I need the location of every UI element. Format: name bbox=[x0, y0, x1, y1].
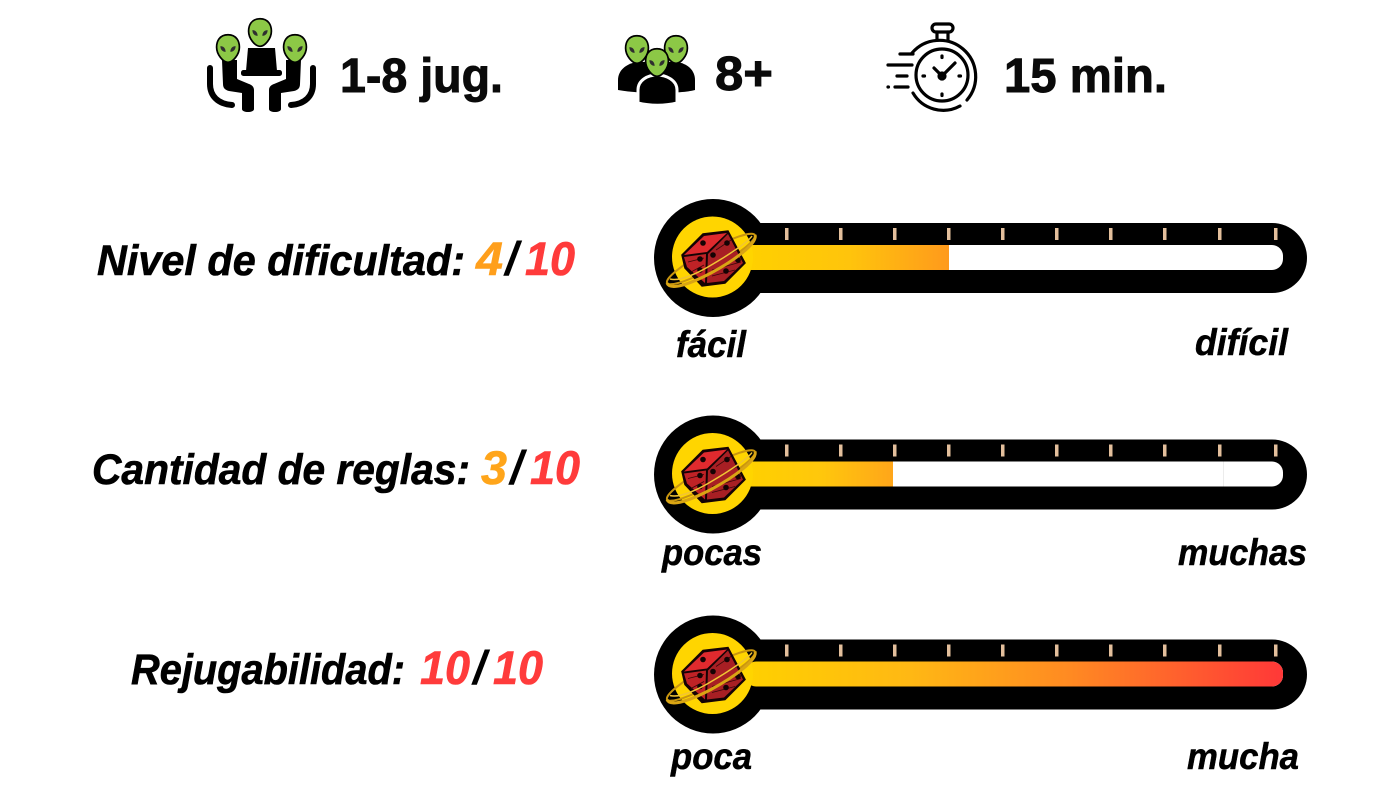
label: difficulty: 4 bbox=[475, 232, 503, 285]
text: age: 8+ bbox=[715, 48, 773, 101]
icon: stopwatch bbox=[888, 24, 976, 110]
label: rules: 3 bbox=[481, 441, 507, 494]
text: many: muchas bbox=[1178, 532, 1307, 573]
label: replayability: 10 bbox=[493, 641, 543, 694]
label: replayability: / bbox=[471, 641, 491, 694]
text: easy: fácil bbox=[676, 324, 747, 365]
label: rules: Cantidad de reglas: bbox=[92, 446, 470, 494]
label: rules: / bbox=[508, 441, 528, 494]
text: players: 1-8 jug. bbox=[340, 50, 503, 103]
label: replayability bbox=[131, 641, 543, 694]
label: replayability: 10 bbox=[420, 641, 470, 694]
text: few: pocas bbox=[661, 532, 762, 573]
text: duration: 15 min. bbox=[1004, 50, 1167, 103]
label: replayability: Rejugabilidad: bbox=[131, 646, 405, 694]
text: hard: difícil bbox=[1195, 322, 1289, 363]
label: difficulty: 10 bbox=[525, 232, 575, 285]
icon: aliens around a table bbox=[210, 19, 313, 112]
label: difficulty: Nivel de dificultad: bbox=[97, 237, 465, 285]
label: difficulty: / bbox=[503, 232, 523, 285]
gauge: rules bbox=[654, 416, 1307, 534]
gauge: replayability bbox=[654, 616, 1307, 734]
gauge: difficulty bbox=[654, 199, 1307, 317]
icon: group of aliens bbox=[618, 36, 695, 105]
text: much: mucha bbox=[1187, 736, 1299, 777]
label: rules: 10 bbox=[530, 441, 580, 494]
text: little: poca bbox=[670, 736, 752, 777]
